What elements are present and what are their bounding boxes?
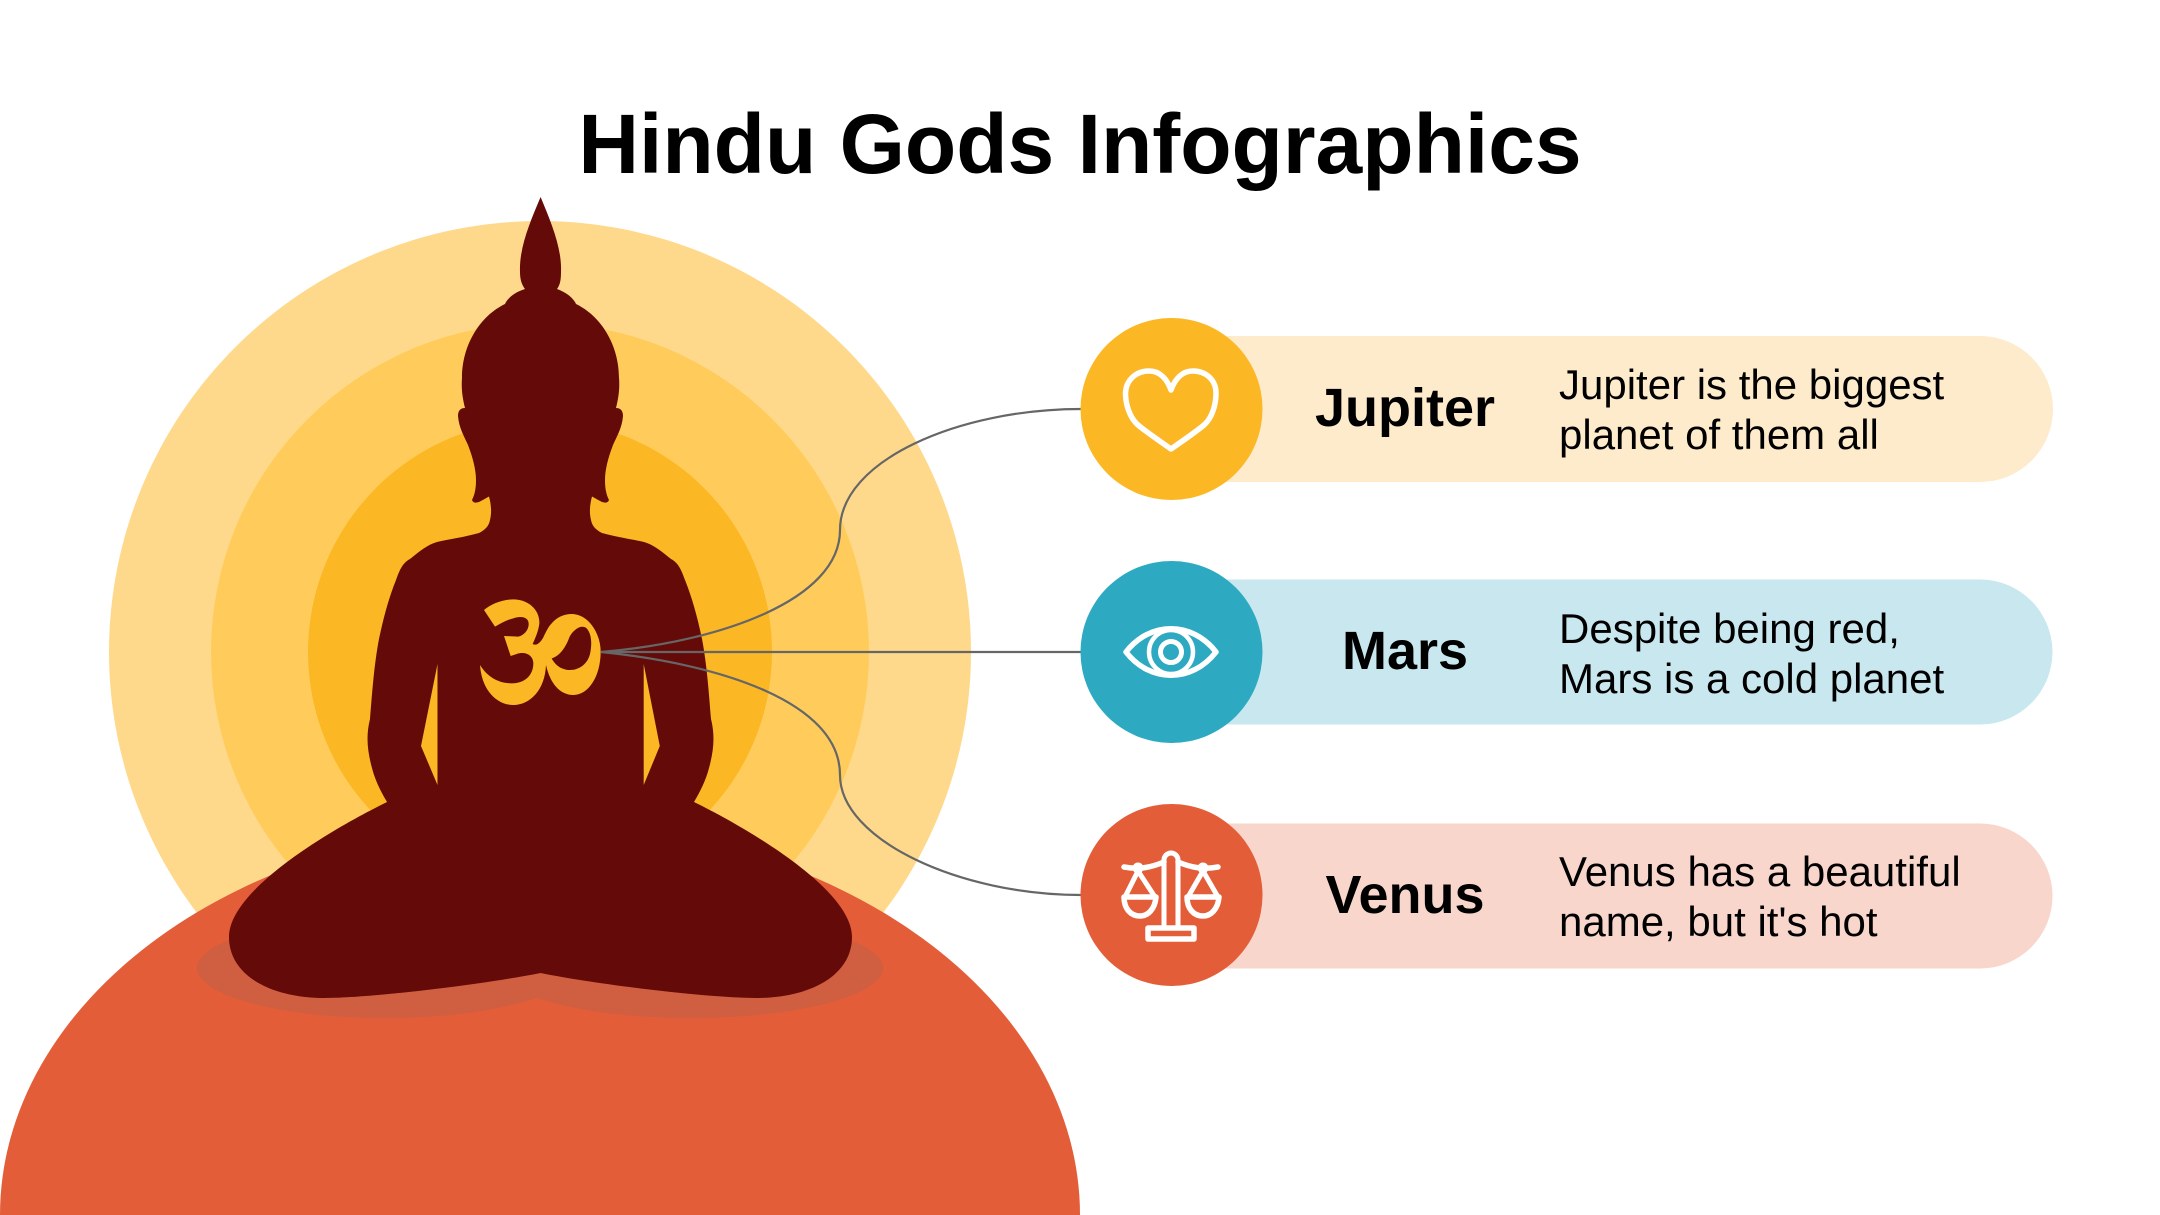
text: Venus description: Venus has a beautiful xyxy=(1559,848,1961,895)
panel: Venus xyxy=(1080,804,2052,986)
connector lines xyxy=(601,409,1081,895)
icon circle: Mars xyxy=(1080,561,1262,743)
panel: Mars xyxy=(1080,561,2052,743)
pill background: Jupiter xyxy=(1171,336,2053,482)
icon: scales xyxy=(1124,853,1219,939)
heading: Venus: Venus xyxy=(1325,865,1485,925)
icon circle: Jupiter xyxy=(1080,318,1262,500)
illustration: sun halo circles xyxy=(109,221,971,1083)
illustration: right arm gap xyxy=(644,664,660,785)
text: Mars description: Mars is a cold planet xyxy=(1559,655,1945,702)
illustration: left arm gap xyxy=(421,664,438,785)
pill background: Mars xyxy=(1171,580,2052,724)
heading: Jupiter: Jupiter xyxy=(1315,378,1495,438)
icon: om symbol xyxy=(480,599,601,705)
text: Venus description: name, but it's hot xyxy=(1559,898,1878,945)
icon circle: Venus xyxy=(1080,804,1262,986)
text: Jupiter description: Jupiter is the biggest xyxy=(1559,361,1944,408)
title: Hindu Gods Infographics xyxy=(578,97,1582,191)
illustration: figure shadow xyxy=(197,918,883,1018)
text: Jupiter description: planet of them all xyxy=(1559,411,1879,458)
panel: Jupiter xyxy=(1080,318,2053,500)
heading: Mars: Mars xyxy=(1342,621,1468,681)
text: Mars description: Despite being red, xyxy=(1559,605,1900,652)
illustration: meditating silhouette xyxy=(229,197,852,998)
icon: heart xyxy=(1126,371,1216,449)
illustration: red hill xyxy=(0,823,1080,1215)
pill background: Venus xyxy=(1171,824,2052,968)
icon: eye xyxy=(1126,629,1216,675)
